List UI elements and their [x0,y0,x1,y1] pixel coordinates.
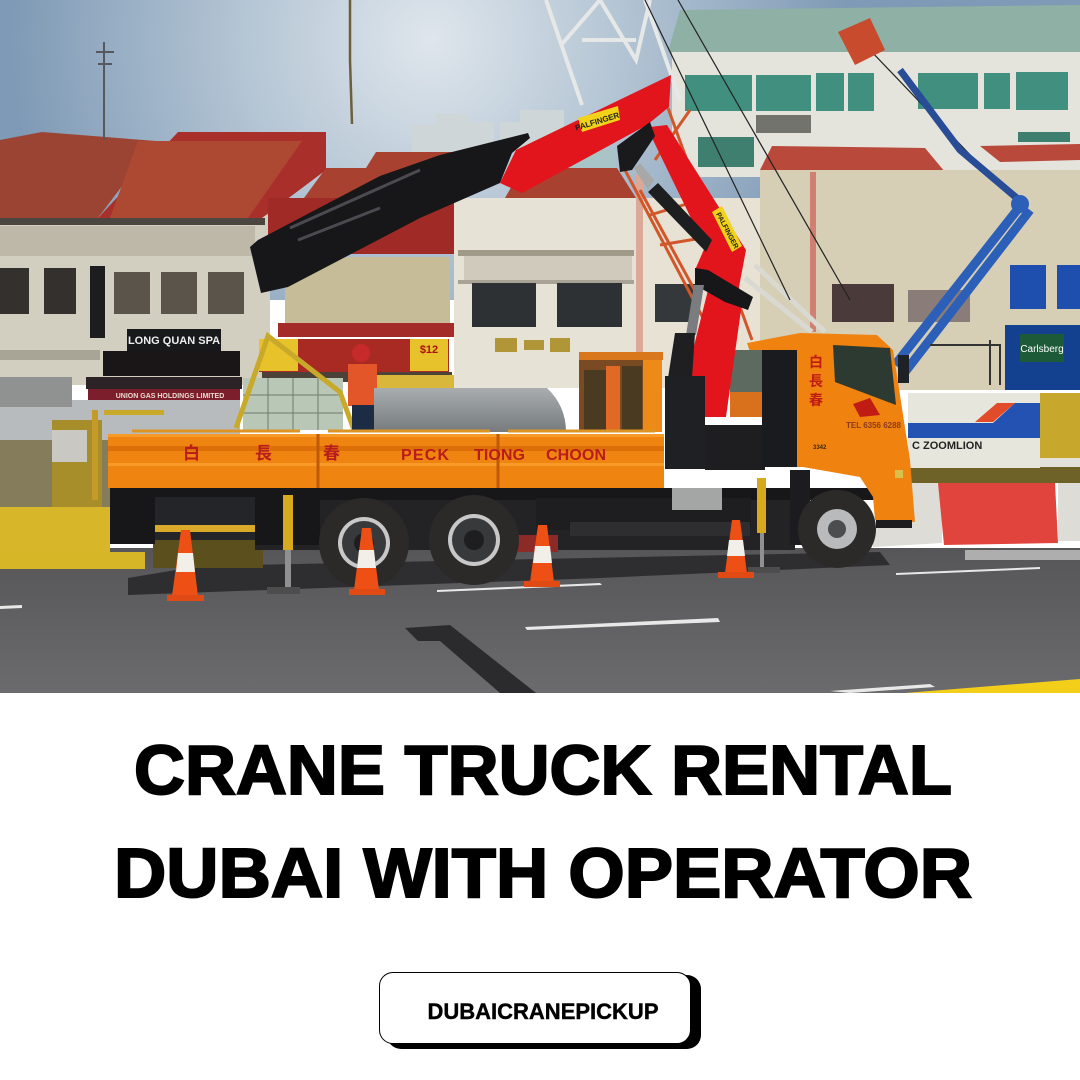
truck shadow [128,552,890,595]
title [114,731,972,912]
right cream building: Carlsberg [1020,344,1064,355]
aerial antenna [96,42,114,140]
left shophouses [0,132,326,508]
excavator behind truck [895,70,1040,468]
truck bed: TIONG [474,447,525,464]
truck bed: CHOON [546,447,606,464]
cab: 春 [809,392,823,408]
button: DUBAICRANEPICKUP [379,972,701,1049]
cab [730,333,915,545]
background hoist hook [838,18,885,65]
cab: 3342 [813,445,827,451]
left shophouses: LONG QUAN SPA [128,335,220,347]
middle red building [259,152,470,389]
rear headboard with nets [579,352,663,432]
road markings [0,550,1080,693]
cab: TEL 6356 6288 [846,421,902,430]
photo: orange crane truck on a street [0,0,1080,693]
red and white road barriers right [873,393,1080,547]
truck bed: 春 [323,444,340,463]
truck bed: 白 [183,444,200,463]
middle red building: $12 [420,344,438,356]
right cream building [668,5,1080,390]
crane arm: PALFINGER [574,111,621,133]
crane base platform [705,425,765,470]
centre white building [454,168,770,388]
crane arm [250,75,753,469]
water tank and worker [236,336,377,432]
button: DUBAICRANEPICKUP: DUBAICRANEPICKUP [427,999,658,1024]
yellow kerb line [905,679,1080,693]
truck bed: 長 [255,444,272,463]
pole shadow [405,625,536,693]
truck bed: PECK [401,447,449,464]
sky [0,0,1080,300]
hanging hook [350,0,352,124]
wheels [319,490,876,588]
background towers [412,110,616,170]
guy cables [645,0,975,300]
crane arm: PALFINGER [714,212,739,250]
cab: 白 [809,354,823,370]
title: CRANE TRUCK RENTAL [134,731,952,809]
under-body shadow [255,490,795,550]
title: DUBAI WITH OPERATOR [114,834,972,912]
concrete pipe [374,388,566,432]
chassis [110,488,890,552]
traffic cones [167,520,754,601]
background lattice crane [546,0,825,332]
excavator behind truck: C ZOOMLION [912,440,982,452]
truck bed [108,431,664,488]
yellow barriers left [0,507,263,569]
cab: 長 [809,373,823,389]
outrigger legs [267,478,780,594]
road [0,548,1080,693]
left shophouses: UNION GAS HOLDINGS LIMITED [116,393,224,400]
